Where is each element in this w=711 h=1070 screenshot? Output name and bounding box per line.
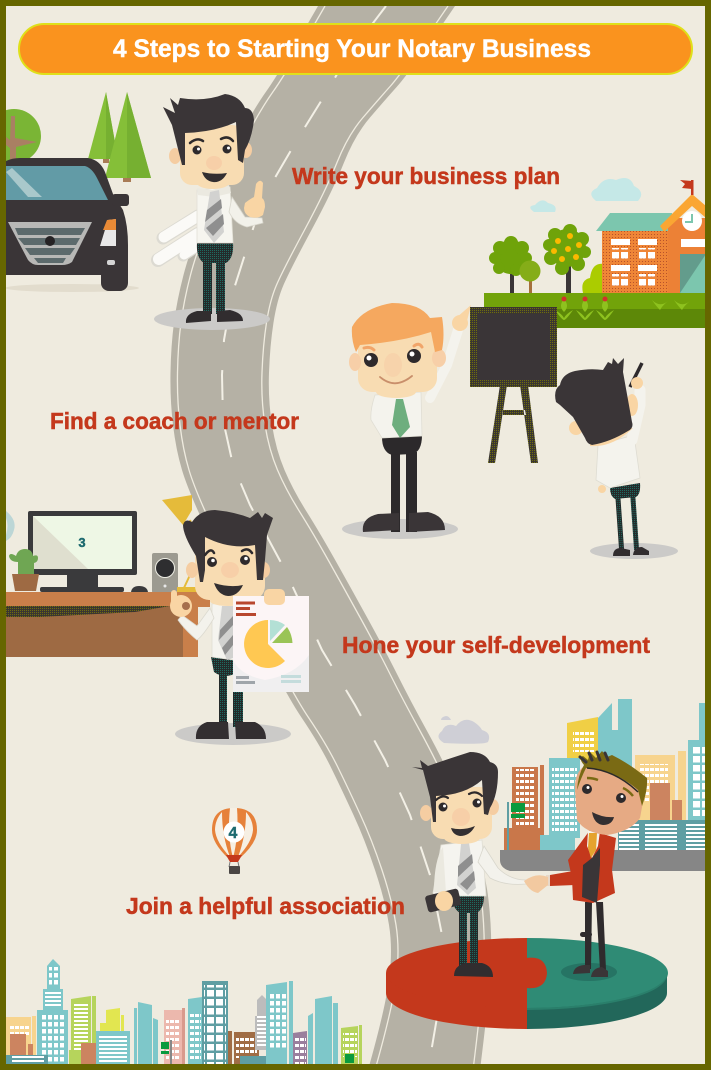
title banner (19, 24, 692, 74)
face (195, 535, 265, 600)
text: step 4: Join a helpful association (126, 893, 405, 919)
character: man handshake (412, 752, 526, 977)
screen number: 3 (78, 535, 86, 550)
character: man writing on board (555, 358, 678, 559)
icon: hot air balloon (212, 808, 257, 874)
title: 4 Steps to Starting Your Notary Business (113, 35, 591, 63)
icon: black car (5, 158, 139, 292)
text: step 2: Find a coach or mentor (50, 408, 299, 434)
character: man thumbs up (154, 94, 270, 330)
icon: blackboard (470, 307, 557, 463)
character: blond man pointing (342, 303, 471, 539)
character: man with chart (170, 510, 309, 745)
illustration: bottom city skyline (6, 959, 362, 1064)
text: step 3: Hone your self-development (342, 632, 650, 658)
icon: round tree (0, 109, 41, 163)
building (596, 213, 672, 231)
clouds (591, 178, 641, 201)
thumbs up hand (244, 181, 265, 218)
illustration: school scene (484, 178, 706, 328)
illustration: skyline behind handshake (438, 699, 705, 871)
road (170, 6, 491, 1070)
chart paper (233, 596, 309, 692)
grass (484, 293, 706, 309)
flag (691, 180, 694, 195)
rolled papers (158, 216, 198, 260)
icon: pine trees (88, 92, 151, 182)
balloon number: 4 (229, 825, 238, 842)
illustration: office desk (6, 495, 210, 657)
character: man in red jacket (524, 751, 647, 977)
illustration: puzzle platform (386, 938, 668, 1029)
trees (510, 270, 514, 293)
text: step 1: Write your business plan (292, 163, 560, 189)
flowers and plants (555, 299, 690, 320)
